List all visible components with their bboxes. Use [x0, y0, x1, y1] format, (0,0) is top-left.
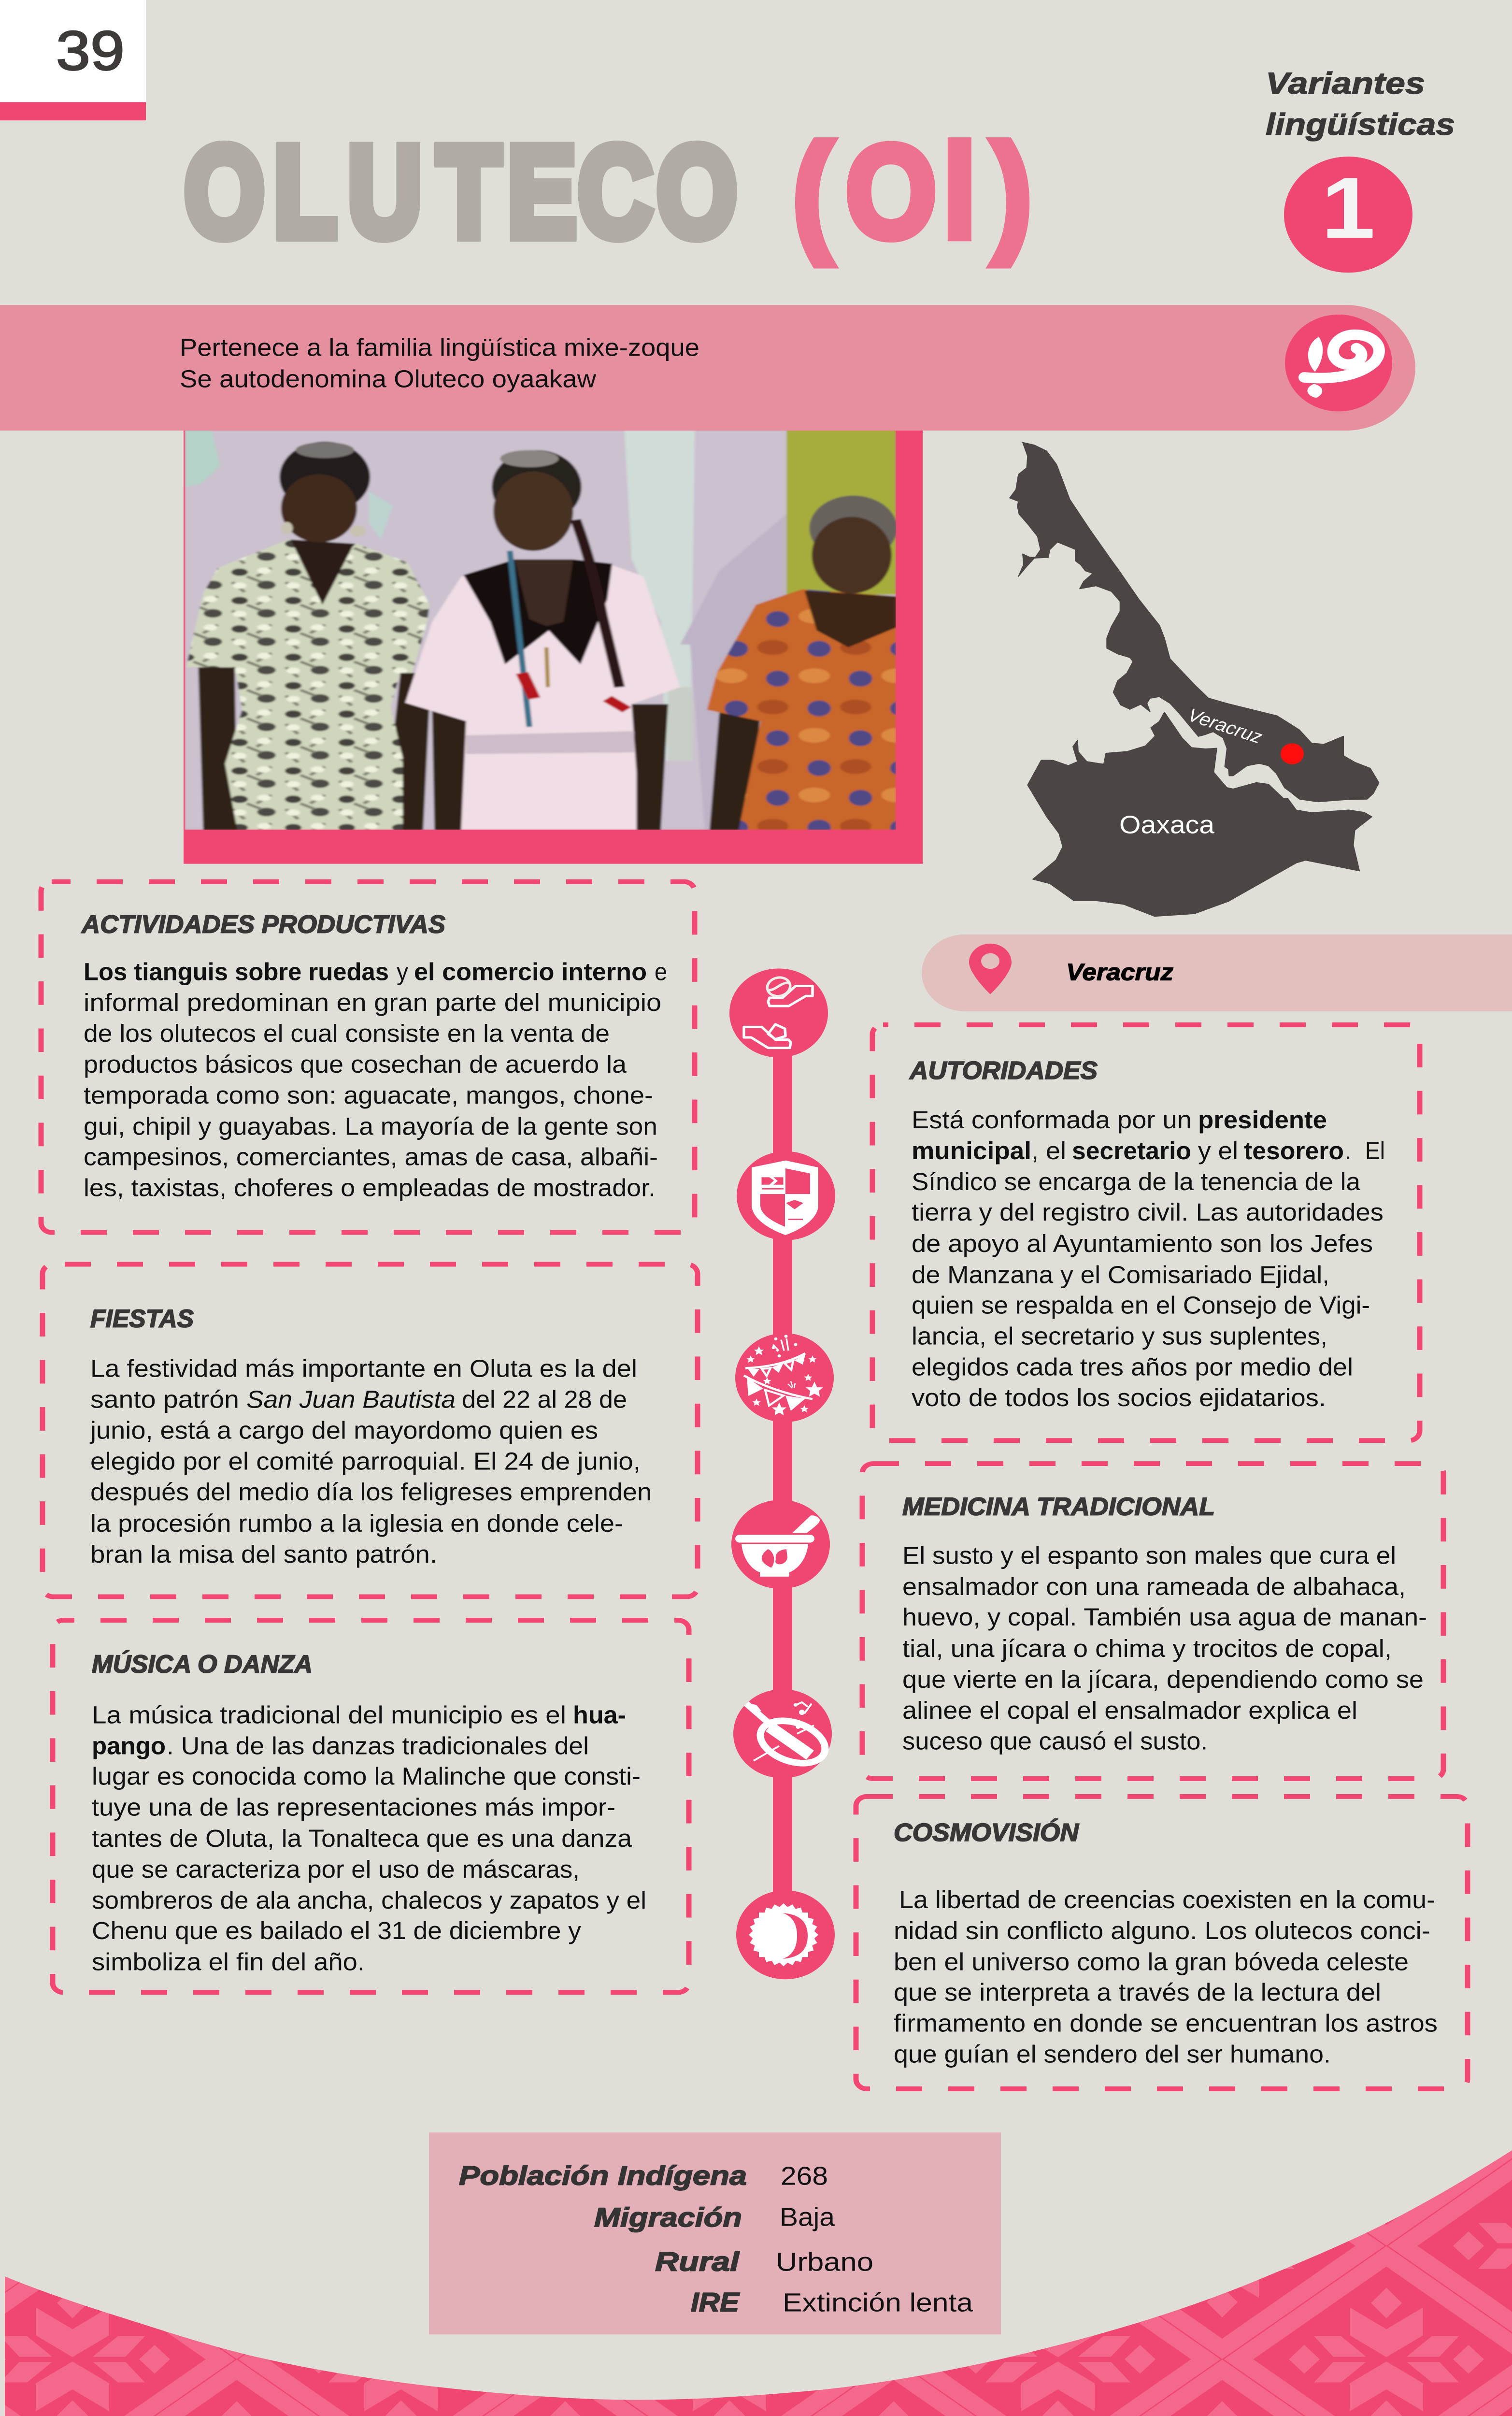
body text: elegidos cada tres años por medio del: [912, 1354, 1353, 1381]
photo with pink frame: [184, 423, 923, 864]
title: [185, 119, 1031, 266]
variantes lingüísticas: [1266, 67, 1455, 273]
panel: medicina tradicional: [862, 1464, 1443, 1779]
banner text: Se autodenomina Oluteco oyaakaw: [180, 366, 596, 393]
body text: [84, 959, 667, 1202]
body text: temporada como son: aguacate, mangos, chone-: [84, 1082, 653, 1109]
body text: [92, 1702, 646, 1976]
stat: migración: [594, 2202, 835, 2232]
timeline with icons: [729, 968, 835, 1979]
body text: de Manzana y el Comisariado Ejidal,: [912, 1262, 1329, 1289]
icon: bunting and stars: [735, 1333, 834, 1422]
body text: hua-: [573, 1702, 626, 1729]
body text: La libertad de creencias coexisten en la comu-: [899, 1887, 1435, 1913]
body text: e: [655, 959, 667, 986]
body text: del 22 al 28 de: [462, 1386, 627, 1413]
footer woven band: [5, 2150, 1512, 2416]
panel: música o danza: [53, 1620, 689, 1992]
body text: la procesión rumbo a la iglesia en donde cele-: [90, 1510, 623, 1537]
body text: Síndico se encarga de la tenencia de la: [912, 1168, 1360, 1195]
icon: shield: [737, 1151, 835, 1240]
body text: San Juan Bautista: [246, 1386, 456, 1413]
body text: alinee el copal el ensalmador explica el: [902, 1697, 1357, 1725]
body text: y el: [1198, 1137, 1238, 1165]
map region: Oaxaca: [1027, 712, 1372, 916]
body text: huevo, y copal. También usa agua de manan-: [902, 1604, 1427, 1631]
map: Oaxaca: [1119, 811, 1215, 839]
body text: nidad sin conflicto alguno. Los olutecos conci-: [894, 1918, 1430, 1945]
stat: IRE: IRE: [691, 2287, 740, 2317]
banner text: [180, 334, 699, 393]
location pill: Veracruz: [922, 935, 1512, 1011]
body text: santo patrón: [90, 1386, 239, 1413]
banner text: Pertenece a la familia lingüística mixe-zoque: [180, 334, 699, 361]
body text: presidente: [1198, 1107, 1327, 1134]
variantes lingüísticas: lingüísticas: [1266, 108, 1455, 142]
body text: que vierte en la jícara, dependiendo como se: [902, 1667, 1424, 1694]
stat: IRE: Extinción lenta: [783, 2288, 973, 2317]
stat: IRE: [691, 2287, 973, 2317]
body text: sombreros de ala ancha, chalecos y zapatos y el: [92, 1887, 646, 1914]
panel: cosmovisión: [856, 1797, 1468, 2089]
body text: voto de todos los socios ejidatarios.: [912, 1384, 1326, 1411]
location pill: Veracruz: Veracruz: [1066, 959, 1173, 985]
body text: de apoyo al Ayuntamiento son los Jefes: [912, 1231, 1373, 1258]
banner: language family: [0, 305, 1415, 431]
title: OLUTECO: [185, 120, 737, 264]
body text: pango: [92, 1733, 166, 1760]
body text: productos básicos que cosechan de acuerdo la: [84, 1051, 627, 1078]
body text: que se interpreta a través de la lectura del: [894, 1979, 1381, 2006]
body text: tierra y del registro civil. Las autoridades: [912, 1199, 1384, 1226]
stat: rural: Rural: [655, 2246, 740, 2277]
body text: Está conformada por un: [912, 1107, 1192, 1134]
map region: Veracruz: [1010, 443, 1379, 802]
panel: fiestas: [43, 1264, 698, 1596]
body text: , el: [1031, 1137, 1066, 1165]
body text: Los tianguis sobre ruedas: [84, 959, 389, 986]
body text: [894, 1887, 1438, 2068]
panel: autoridades: [872, 1025, 1420, 1440]
body text: les, taxistas, choferes o empleadas de mostrador.: [84, 1175, 656, 1202]
heading: COSMOVISIÓN: [894, 1819, 1080, 1846]
icon: swirl: [1285, 315, 1392, 411]
body text: secretario: [1072, 1137, 1191, 1165]
body text: suceso que causó el susto.: [902, 1728, 1208, 1755]
body text: Chenu que es bailado el 31 de diciembre y: [92, 1918, 581, 1945]
body text: [89, 1355, 652, 1568]
body text: elegido por el comité parroquial. El 24 de junio,: [90, 1448, 641, 1475]
stat: migración: Migración: [594, 2202, 742, 2232]
body text: .: [1345, 1137, 1351, 1165]
body text: . Una de las danzas tradicionales del: [167, 1733, 589, 1760]
stat: población indígena: Población Indígena: [459, 2160, 747, 2191]
body text: ensalmador con una rameada de albahaca,: [902, 1573, 1406, 1600]
body text: campesinos, comerciantes, amas de casa, albañi-: [84, 1144, 658, 1171]
body text: informal predominan en gran parte del municipio: [84, 989, 661, 1016]
body text: gui, chipil y guayabas. La mayoría de la gente son: [84, 1113, 657, 1140]
heading: MEDICINA TRADICIONAL: [902, 1493, 1215, 1521]
page number tab: 39: [56, 19, 125, 82]
map: [1010, 443, 1379, 916]
icon: sun and moon: [736, 1890, 835, 1979]
heading: ACTIVIDADES PRODUCTIVAS: [81, 910, 445, 938]
heading: MÚSICA O DANZA: [92, 1650, 313, 1678]
icon: hands and seed: [729, 968, 828, 1058]
stat: rural: [655, 2246, 873, 2277]
body text: El: [1365, 1137, 1385, 1165]
body text: [902, 1542, 1427, 1755]
body text: y: [397, 959, 408, 986]
body text: bran la misa del santo patrón.: [90, 1541, 437, 1568]
body text: junio, está a cargo del mayordomo quien es: [89, 1417, 598, 1444]
body text: lancia, el secretario y sus suplentes,: [912, 1323, 1327, 1350]
body text: quien se respalda en el Consejo de Vigi-: [912, 1292, 1370, 1319]
icon: violin and notes: [733, 1689, 832, 1778]
stat: población indígena: 268: [781, 2161, 828, 2191]
body text: tesorero: [1244, 1137, 1344, 1165]
body text: ben el universo como la gran bóveda celeste: [894, 1949, 1409, 1976]
icon: pin: [969, 944, 1012, 994]
title: (Ol): [793, 119, 1031, 266]
variantes lingüísticas: 1: [1321, 159, 1375, 257]
stats box: [429, 2132, 1001, 2334]
body text: tantes de Oluta, la Tonalteca que es una danza: [92, 1825, 632, 1852]
body text: El susto y el espanto son males que cura el: [902, 1542, 1396, 1569]
body text: simboliza el fin del año.: [92, 1949, 365, 1976]
variantes lingüísticas: Variantes: [1266, 67, 1425, 101]
body text: después del medio día los feligreses emprenden: [90, 1479, 652, 1506]
stat: rural: Urbano: [776, 2247, 873, 2277]
body text: lugar es conocida como la Malinche que consti-: [92, 1763, 641, 1790]
panel: actividades productivas: [41, 882, 695, 1233]
body text: firmamento en donde se encuentran los astros: [894, 2010, 1438, 2037]
body text: La música tradicional del municipio es el: [92, 1702, 566, 1729]
map: Veracruz: [1185, 705, 1265, 748]
page number tab: [0, 0, 146, 120]
heading: AUTORIDADES: [909, 1056, 1098, 1084]
body text: [912, 1107, 1385, 1411]
body text: tuye una de las representaciones más impor-: [92, 1794, 615, 1821]
body text: que se caracteriza por el uso de máscaras,: [92, 1856, 580, 1883]
body text: La festividad más importante en Oluta es la del: [90, 1355, 637, 1382]
body text: municipal: [912, 1137, 1031, 1165]
icon: mortar and pestle: [731, 1500, 830, 1589]
body text: de los olutecos el cual consiste en la venta de: [84, 1020, 610, 1047]
stat: migración: Baja: [780, 2202, 835, 2232]
body text: el comercio interno: [414, 959, 647, 986]
heading: FIESTAS: [90, 1305, 194, 1333]
body text: tial, una jícara o chima y trocitos de copal,: [902, 1635, 1392, 1662]
body text: que guían el sendero del ser humano.: [894, 2041, 1331, 2068]
